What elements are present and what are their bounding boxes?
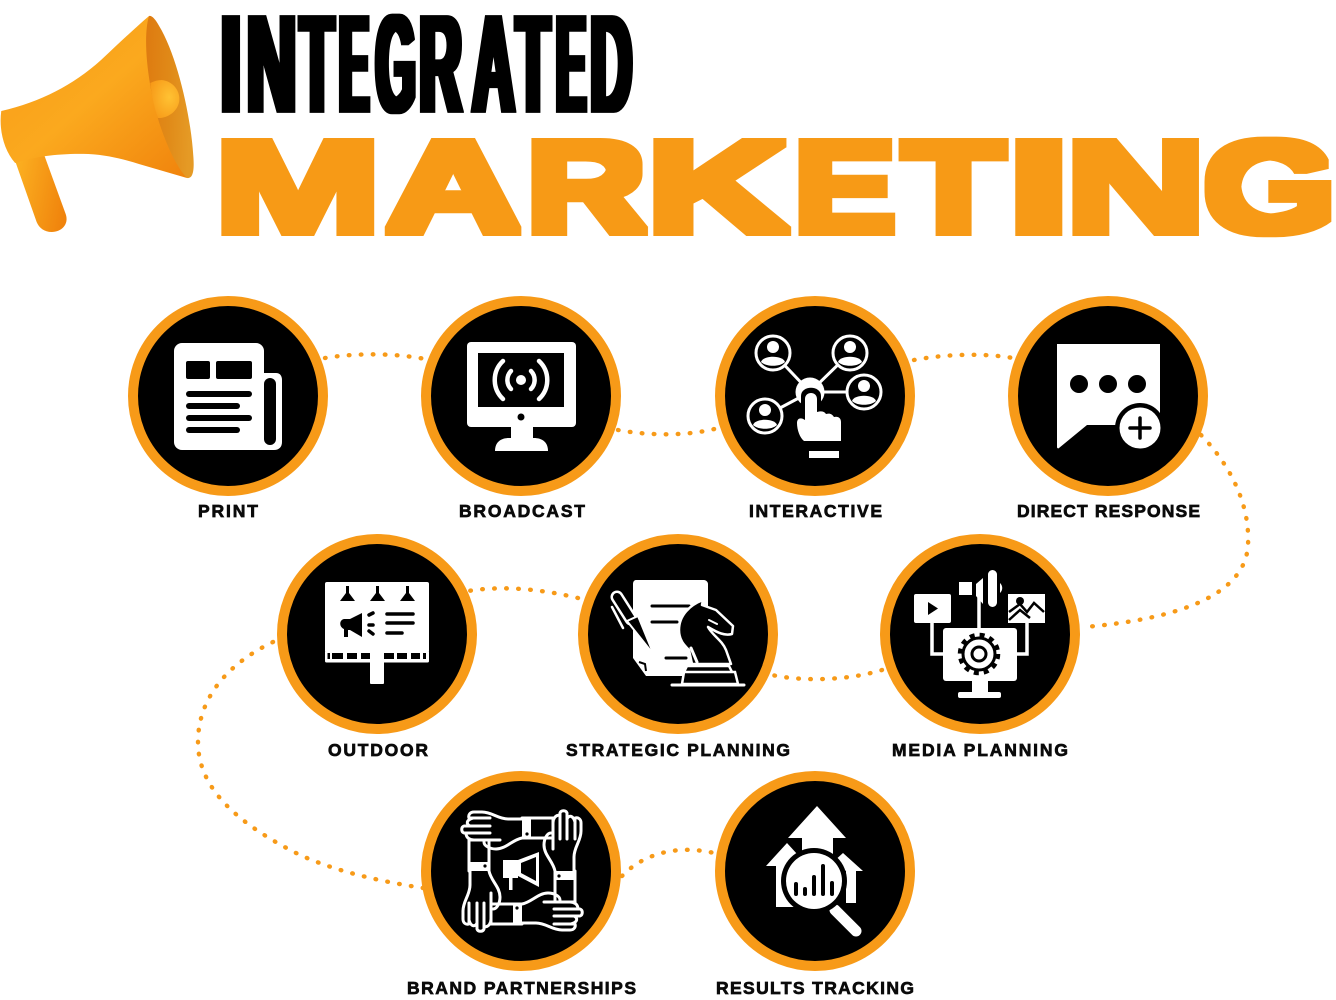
panel: Interactive — [720, 301, 910, 521]
panel: Broadcast — [426, 301, 616, 521]
label: Broadcast: BROADCAST — [459, 501, 585, 521]
label: Outdoor: OUTDOOR — [328, 740, 428, 760]
icon: billboard — [325, 582, 429, 684]
icon: network with pointing hand — [748, 336, 881, 458]
panel: Direct Response — [1013, 301, 1203, 521]
panel: Outdoor — [282, 539, 472, 760]
title: MARKETING: T — [903, 116, 1004, 260]
title: MARKETING: A — [386, 116, 520, 260]
label: Brand Partnerships: BRAND PARTNERSHIPS — [407, 978, 636, 998]
title: MARKETING: G — [1204, 116, 1336, 260]
title: MARKETING: R — [526, 116, 646, 260]
icon: four hands with megaphone — [462, 811, 582, 931]
icon: chat bubble with plus — [1057, 344, 1165, 453]
label: Direct Response: DIRECT RESPONSE — [1017, 501, 1200, 521]
icon: orange megaphone — [1, 16, 194, 232]
panel: Strategic Planning — [566, 539, 790, 760]
title: MARKETING: N — [1065, 116, 1206, 260]
label: Strategic Planning: STRATEGIC PLANNING — [566, 740, 790, 760]
title: MARKETING: M — [214, 116, 382, 260]
label: Media Planning: MEDIA PLANNING — [892, 740, 1068, 760]
dotted connector path — [198, 354, 1248, 888]
icon: media monitor with gear — [914, 570, 1045, 698]
icon: monitor with signal — [467, 342, 576, 451]
panel: Print — [133, 301, 323, 521]
title: MARKETING: E — [794, 116, 895, 260]
title: MARKETING: I — [1005, 116, 1073, 260]
icon: newspaper — [174, 343, 282, 450]
panel: Brand Partnerships — [407, 776, 636, 998]
panel: Media Planning — [885, 539, 1075, 760]
icon: arrows and magnifier — [766, 806, 863, 931]
label: Print: PRINT — [198, 501, 258, 521]
label: Interactive: INTERACTIVE — [749, 501, 882, 521]
panel: Results Tracking — [716, 776, 914, 998]
label: Results Tracking: RESULTS TRACKING — [716, 978, 914, 998]
icon: document, pen and chess knight — [612, 580, 744, 685]
title: MARKETING: K — [646, 116, 787, 260]
